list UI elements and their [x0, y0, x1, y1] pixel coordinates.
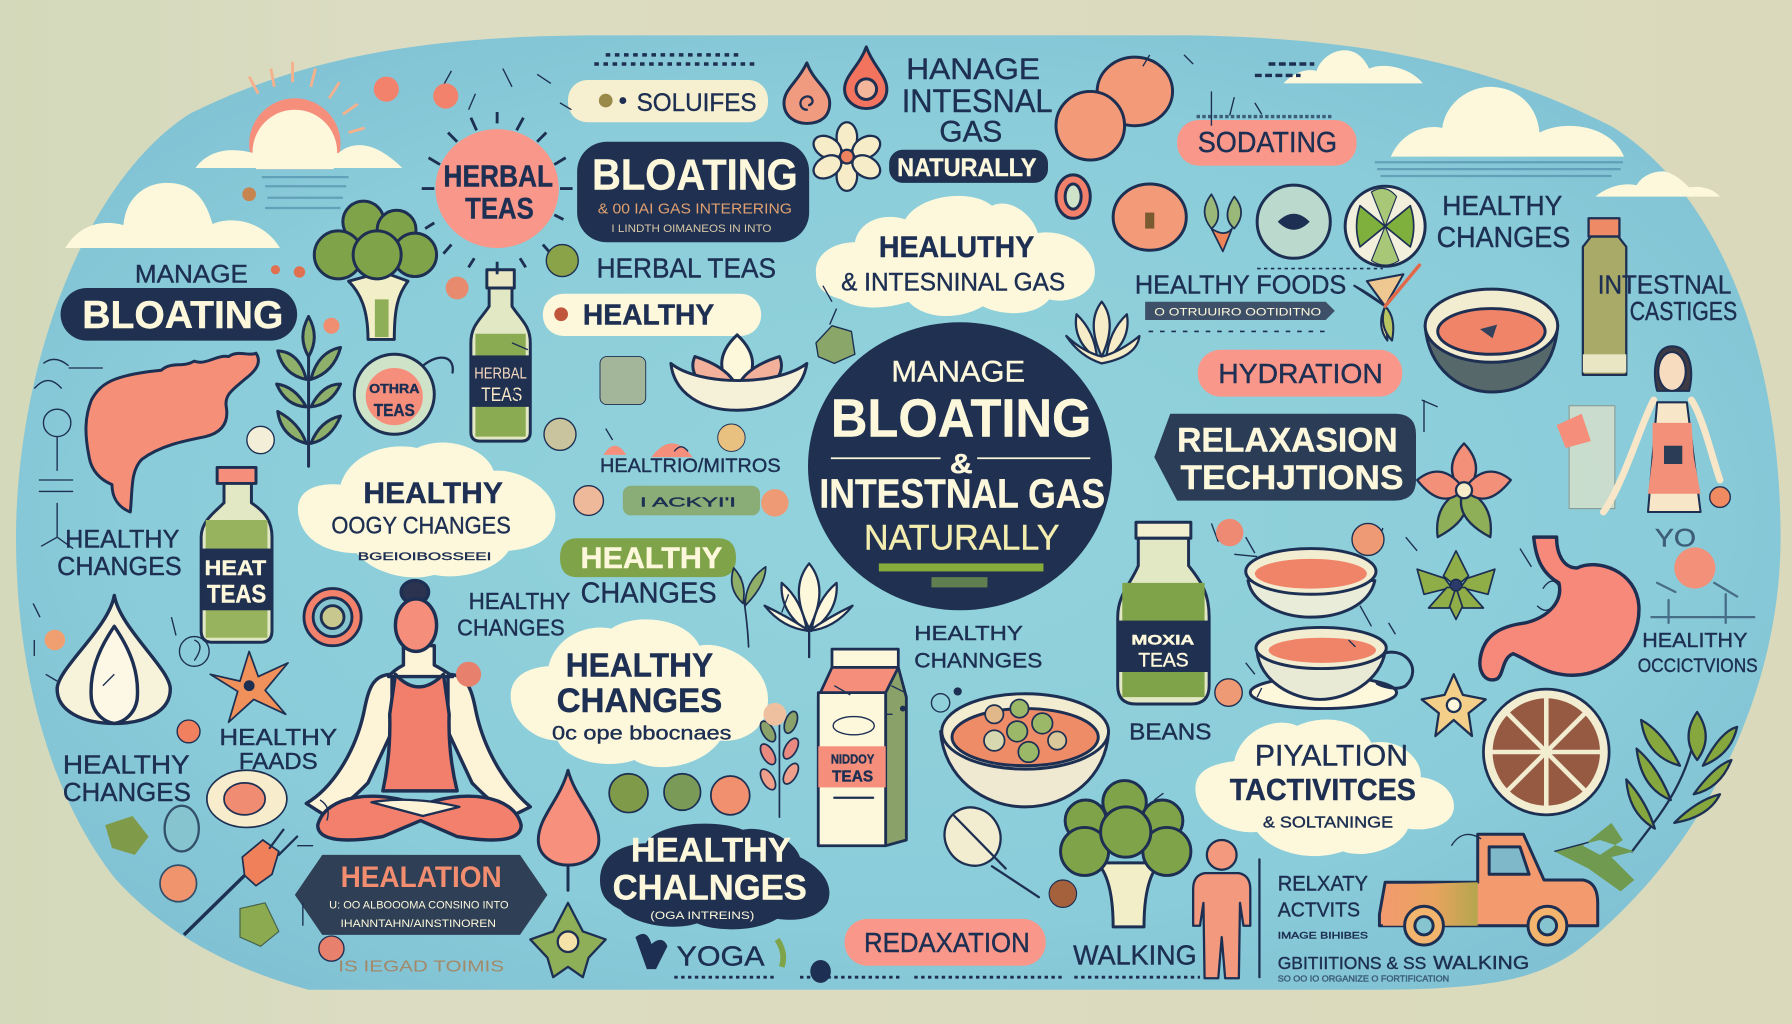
label: healthy faads: FAADS: [239, 748, 318, 774]
label: healthy changes lower left: [63, 750, 191, 807]
label: healthy changes lower left: HEALTHY: [63, 750, 190, 780]
cloud: piyaltion tactivities: PIYALTION: [1255, 740, 1408, 773]
icon: bowl with petals: [671, 335, 807, 410]
icon: milk carton: [818, 649, 906, 846]
label: relaxity activits: GBITIITIONS & SS: [1278, 953, 1426, 973]
icon: broccoli top: [314, 201, 437, 339]
sun with rays: [248, 62, 365, 170]
icon: orange ring: [1056, 175, 1090, 218]
icon: tea cup label: TEAS: [374, 400, 415, 420]
icon: bottle heat teas: [201, 467, 272, 642]
cloud: healthy changes center left: 0c ope bbocnaes: [552, 722, 731, 744]
icon: tea cup with saucer: [1250, 627, 1413, 709]
icon: flower top: [809, 122, 884, 191]
panel: relaxation techniques: TECHJTIONS: [1181, 459, 1403, 497]
icon: flower bottom: [530, 903, 606, 977]
icon: stomach: [1480, 537, 1639, 680]
pill: healthy green: HEALTHY: [581, 542, 722, 575]
cloud: healuthy: [816, 196, 1095, 316]
label: healthy occictvions: HEALITHY: [1642, 629, 1748, 652]
icon: drop with ring: [845, 47, 887, 109]
icon: bottle heat teas: TEAS: [207, 580, 266, 608]
card behind woman: [1557, 406, 1615, 509]
panel: bloating dark block: [577, 142, 809, 242]
figure: standing person: [1193, 840, 1250, 978]
label: relaxity activits: WALKING: [1433, 952, 1529, 973]
icon: circle citrus: [1345, 186, 1425, 266]
pill: bloating: [61, 288, 297, 341]
icon: lotus right: [1066, 302, 1139, 363]
icon: star flower yellow: [1422, 674, 1486, 736]
icon: fork: [184, 830, 297, 935]
label: healthy changes lower left: CHANGES: [63, 777, 191, 807]
icon: green flower: [1417, 551, 1495, 619]
icon: circle herb: [1257, 185, 1330, 258]
label: healthy changes left: HEALTHY: [65, 525, 180, 553]
vertical rule: [1258, 859, 1260, 977]
icon: milk carton: TEAS: [832, 769, 873, 786]
label: healthy changes by yoga: CHANGES: [457, 614, 565, 640]
label: healthy foods: HEALTHY FOODS: [1135, 270, 1346, 300]
label: beans: BEANS: [1129, 718, 1211, 744]
cloud: healthy body changes: HEALTHY: [363, 477, 503, 510]
icon: orange flower: [210, 651, 288, 722]
icon: green rocks and targets lower left: [105, 806, 279, 946]
sun badge: herbal teas: TEAS: [465, 192, 534, 225]
cloud top small right: [1283, 50, 1423, 83]
panel: healation: [295, 855, 547, 935]
label: intestinal castiges: [1598, 270, 1737, 326]
cloud: healthy body changes: BGEIOIBOSSEEI: [358, 551, 491, 563]
pill: healthy green: [560, 538, 736, 577]
cloud: healthy body changes: OOGY CHANGES: [331, 513, 511, 540]
icon: drop with spiral: [784, 63, 830, 123]
icon: green foliage: [1554, 823, 1634, 891]
cloud small far right: [1595, 171, 1720, 197]
sun badge: herbal teas: HERBAL: [443, 158, 553, 193]
cloud: healuthy: HEALUTHY: [879, 231, 1034, 264]
icon: pickup truck: [1379, 834, 1598, 945]
icon: bottle moxia teas: TEAS: [1138, 649, 1189, 671]
panel: healation: HEALATION: [341, 861, 502, 894]
panel: bloating dark block: BLOATING: [592, 152, 798, 200]
green tag: I ACKYI'I: [640, 495, 736, 509]
pill: bloating: BLOATING: [82, 294, 283, 337]
icon: soup bowl dark: [1425, 289, 1558, 392]
pill: hydration: [1198, 350, 1402, 397]
pill: sodating: SODATING: [1198, 127, 1337, 159]
icon: green blob: [816, 326, 855, 363]
central circle: main title: &: [950, 448, 973, 479]
water stripes under clouds: [262, 162, 1623, 208]
label: healthy changes by yoga: [457, 588, 570, 640]
central circle: main title: INTESTNAL GAS: [819, 470, 1105, 516]
pill: soluifes: SOLUIFES: [637, 89, 757, 117]
panel: relaxation techniques: [1154, 414, 1416, 501]
label: healthy faads: HEALTHY: [219, 724, 337, 750]
panel: bloating dark block: & 00 IAI GAS INTERERING: [598, 202, 792, 218]
panel: healthy changes dark cloud: CHALNGES: [613, 867, 807, 907]
label: healthy faads: [219, 724, 337, 774]
central circle: main title: BLOATING: [831, 389, 1091, 449]
pill: redaxation: [845, 919, 1046, 966]
icon: target: [304, 589, 361, 646]
icon: soup bowl: [1246, 549, 1376, 617]
label: relaxity activits: [1278, 870, 1529, 973]
icon: broccoli bottom: [1061, 781, 1191, 927]
label: healthy changes center: HEALTHY: [914, 622, 1023, 645]
label: herbal teas: HERBAL TEAS: [597, 253, 776, 284]
icon: tall bottle: [1583, 218, 1626, 375]
label: healthy occictvions: [1638, 629, 1758, 677]
sun badge: herbal teas: [422, 112, 573, 274]
label: intestinal castiges: CASTIGES: [1630, 296, 1737, 326]
pill: naturally: NATURALLY: [897, 154, 1037, 182]
label: changes: CHANGES: [581, 577, 717, 609]
icon: bottle herbal teas: TEAS: [481, 384, 522, 406]
icon: orange halved: [1113, 184, 1186, 250]
dark tag under healthy foods: [1145, 302, 1335, 320]
icon: yoga figure doodles: [635, 934, 831, 983]
icon: coral flower: [1417, 443, 1511, 537]
heading: manage intestinal gas: HANAGE: [906, 53, 1040, 86]
icon: milk carton: NIDDOY: [831, 752, 875, 766]
green tag: [623, 486, 760, 515]
label: healthy occictvions: OCCICTVIONS: [1638, 655, 1758, 677]
label: walking: WALKING: [1073, 940, 1197, 971]
icon: bean soup bowl: [941, 694, 1109, 807]
panel: healthy changes dark cloud: (OGA INTREINS): [650, 910, 755, 922]
label: healthy changes center: CHANNGES: [914, 647, 1042, 672]
label: healthy changes left: [57, 525, 182, 581]
heading: manage intestinal gas: [902, 53, 1053, 149]
figure: standing woman: [1603, 346, 1720, 512]
icon: lotus white: [765, 563, 853, 657]
icon: bottle heat teas: HEAT: [205, 555, 267, 580]
label: relaxity activits: RELXATY: [1278, 870, 1368, 895]
icon: bun food: [207, 770, 287, 827]
icon: spoon: [934, 797, 1039, 897]
label: manage: MANAGE: [135, 260, 248, 288]
heading: manage intestinal gas: INTESNAL: [902, 83, 1053, 119]
label: healthy foods blurred: HEALTRIO/MITROS: [600, 455, 781, 477]
icon: bottle moxia teas: MOXIA: [1131, 633, 1194, 648]
panel: bloating dark block: I LINDTH OIMANEOS IN INTO: [611, 223, 772, 235]
label: yoga: YOGA: [677, 941, 765, 972]
icon: butterfly leaf: [1205, 194, 1241, 251]
panel: healation: IHANNTAHN/AINSTINOREN: [341, 918, 496, 930]
pill: soluifes: [568, 80, 768, 122]
panel: healthy changes dark cloud: HEALTHY: [631, 832, 791, 870]
pill: healthy: [543, 294, 761, 336]
doodle text: small caption right bottom: SO OO IO ORGANIZE O FORTIFICATION: [1278, 975, 1449, 984]
icon: tea cup label: OTHRA: [369, 382, 419, 396]
dark tag under healthy foods: O OTRUUIRO OOTIDITNO: [1154, 306, 1321, 318]
cloud large right: [1391, 87, 1624, 157]
central circle: main title: NATURALLY: [864, 518, 1059, 558]
icon: bottle herbal teas: HERBAL: [474, 365, 527, 382]
doodle caption bottom left: IS IEGAD TOIMIS: [338, 958, 504, 975]
icons: row of fruit: [609, 774, 750, 815]
icon: bottle herbal teas: [471, 270, 530, 441]
central circle: main title: MANAGE: [891, 356, 1025, 389]
icon: two oranges: [1056, 57, 1173, 160]
cloud: healthy changes center left: HEALTHY: [566, 648, 713, 685]
pill: hydration: HYDRATION: [1218, 358, 1383, 389]
icon: star leaf: [1354, 265, 1419, 341]
icon: citrus wheel: [1483, 689, 1609, 815]
icon: liver: [86, 353, 258, 512]
cloud: healthy body changes: [298, 443, 555, 577]
panel: healthy changes dark cloud: [600, 824, 829, 929]
cloud: healuthy: & INTESNINAL GAS: [841, 268, 1065, 296]
label: healthy changes upper right: HEALTHY: [1442, 190, 1562, 221]
heading: manage intestinal gas: GAS: [939, 116, 1002, 149]
icon: wheat sprig: [757, 709, 802, 817]
panel: relaxation techniques: RELAXASION: [1177, 421, 1398, 459]
label: relaxity activits: IMAGE BIHIBES: [1278, 930, 1368, 940]
cloud top left: [195, 145, 402, 168]
label: relaxity activits: ACTVITS: [1278, 899, 1360, 922]
cloud: healthy changes center left: CHANGES: [557, 682, 722, 720]
figure: yoga meditation: [306, 581, 530, 840]
icon: tea cup label: [354, 354, 453, 434]
icon: herb sprig: [277, 317, 341, 466]
icon: garlic: [57, 595, 170, 723]
pill: redaxation: REDAXATION: [864, 927, 1030, 958]
doodle: yo flower: [1651, 524, 1754, 623]
label: healthy changes upper right: CHANGES: [1437, 222, 1570, 254]
pill: healthy: HEALTHY: [583, 300, 714, 332]
icon: coral drop: [538, 770, 599, 890]
cloud left: [65, 183, 280, 248]
icon: side sprig: [732, 567, 766, 647]
icon: leafy branch: [1626, 712, 1737, 851]
icon: bottle moxia teas: [1118, 522, 1209, 704]
panel: healation: U: OO ALBOOOMA CONSINO INTO: [329, 900, 509, 912]
label: intestinal castiges: INTESTNAL: [1598, 270, 1731, 300]
icon: walnut: [1049, 880, 1077, 907]
cloud: piyaltion tactivities: & SOLTANINGE: [1263, 814, 1393, 831]
cloud: healthy changes center left: [511, 619, 768, 767]
label: healthy changes by yoga: HEALTHY: [469, 588, 570, 614]
label: healthy changes upper right: [1437, 190, 1570, 254]
cloud: piyaltion tactivities: TACTIVITCES: [1230, 772, 1416, 807]
label: healthy changes center: [914, 622, 1042, 672]
cloud: piyaltion tactivities: [1195, 719, 1454, 856]
pill: sodating: [1177, 120, 1357, 166]
doodle: yo flower: YO: [1655, 524, 1696, 552]
central circle: main title: [808, 322, 1112, 610]
label: healthy changes left: CHANGES: [57, 551, 182, 581]
misc leaf cluster left of bowl: [600, 357, 745, 457]
